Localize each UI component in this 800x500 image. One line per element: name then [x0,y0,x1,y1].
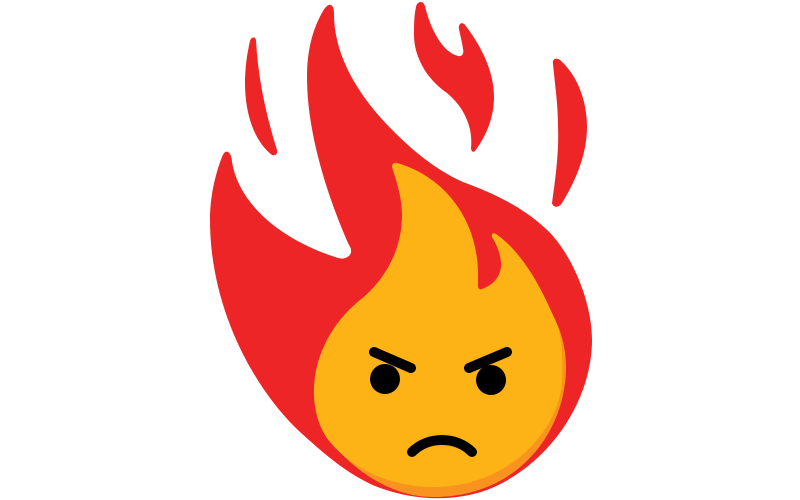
icon: left flame spark [245,37,277,155]
icon: right eyebrow [469,352,507,368]
icon: yellow inner flame [314,163,562,487]
icon: left eye [370,364,400,394]
icon: right flame spark [552,59,587,207]
icon: orange face shadow [335,310,566,497]
icon: main red flame [210,5,592,498]
icon: right eye [476,365,506,395]
icon: frowning mouth [412,440,472,452]
icon: left eyebrow [374,352,411,368]
icon: top center flame spark [414,2,494,152]
